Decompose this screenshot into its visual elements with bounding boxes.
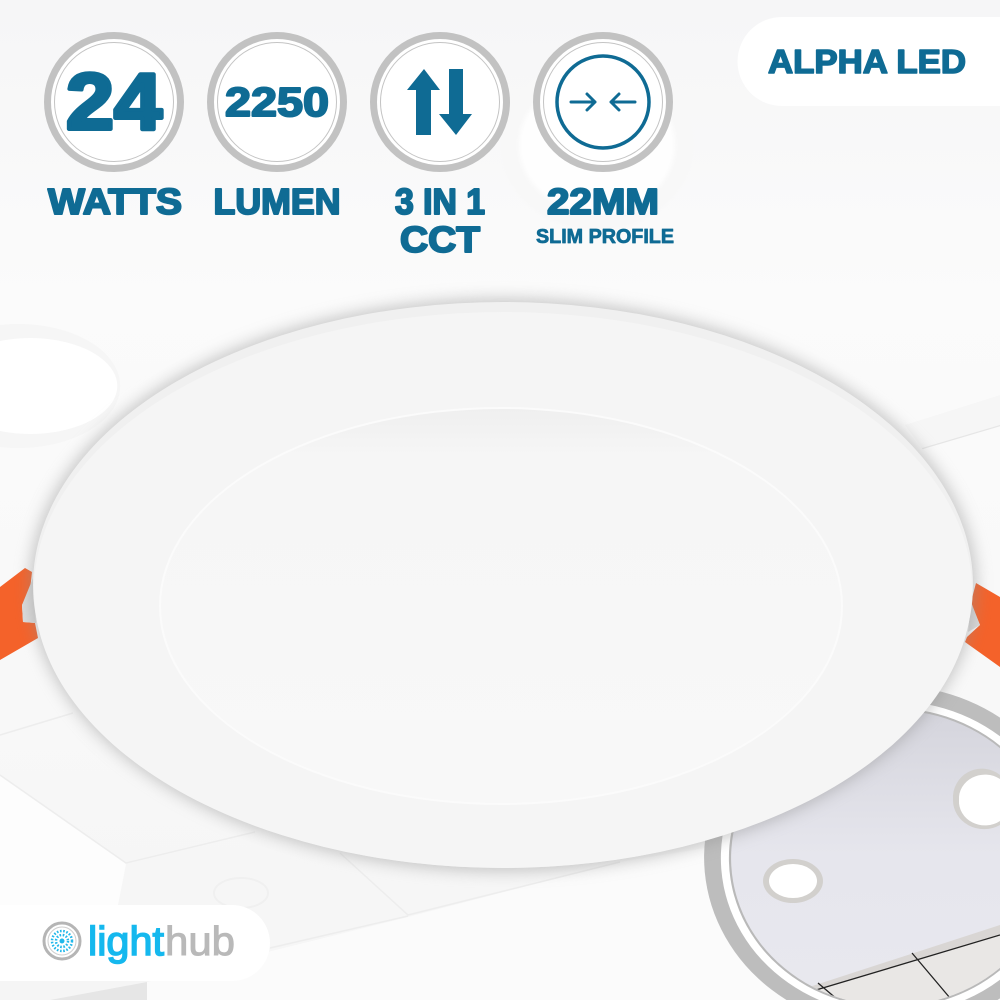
icon: up and down arrows [407, 69, 472, 135]
spec badge: 22mm slim profile [536, 36, 674, 248]
icon: lighthub dots [44, 923, 80, 959]
spec badge: 3 in 1 CCT [374, 36, 506, 260]
icon: slim profile [557, 56, 649, 148]
spec badge: 22mm slim profile: 22MM [547, 181, 659, 222]
spec badge: 24 watts: 24 [66, 57, 163, 146]
spec badge: 24 watts [48, 36, 182, 222]
spec badge: 2250 lumen [210, 36, 344, 222]
spec badge: 2250 lumen: 2250 [225, 79, 329, 125]
brand tag: Alpha LED [738, 17, 1000, 106]
spec badge: 2250 lumen: LUMEN [214, 181, 340, 222]
logo: lighthub: hub [165, 918, 235, 964]
orange spring clip right [965, 583, 1000, 667]
panel rim [33, 302, 973, 868]
logo: lighthub: light [88, 918, 165, 964]
background downlight behind slim profile [501, 60, 693, 230]
inset downlight left [763, 859, 823, 903]
spec badge: 22mm slim profile: SLIM PROFILE [536, 226, 674, 248]
spec badge: 3 in 1 CCT: CCT [400, 219, 480, 260]
panel light face [159, 407, 843, 805]
brand tag: Alpha LED: ALPHA LED [768, 43, 966, 80]
spec badge: 3 in 1 CCT: 3 IN 1 [395, 181, 485, 222]
LED panel [30, 299, 976, 871]
ceiling screw [214, 878, 268, 908]
background downlight [0, 324, 120, 448]
inset photo: ceiling close-up [704, 685, 1000, 1000]
orange spring clip left [0, 568, 38, 660]
logo: lighthub [0, 905, 270, 981]
inset downlight right [953, 769, 1000, 829]
spec badge: 24 watts: WATTS [48, 181, 182, 222]
